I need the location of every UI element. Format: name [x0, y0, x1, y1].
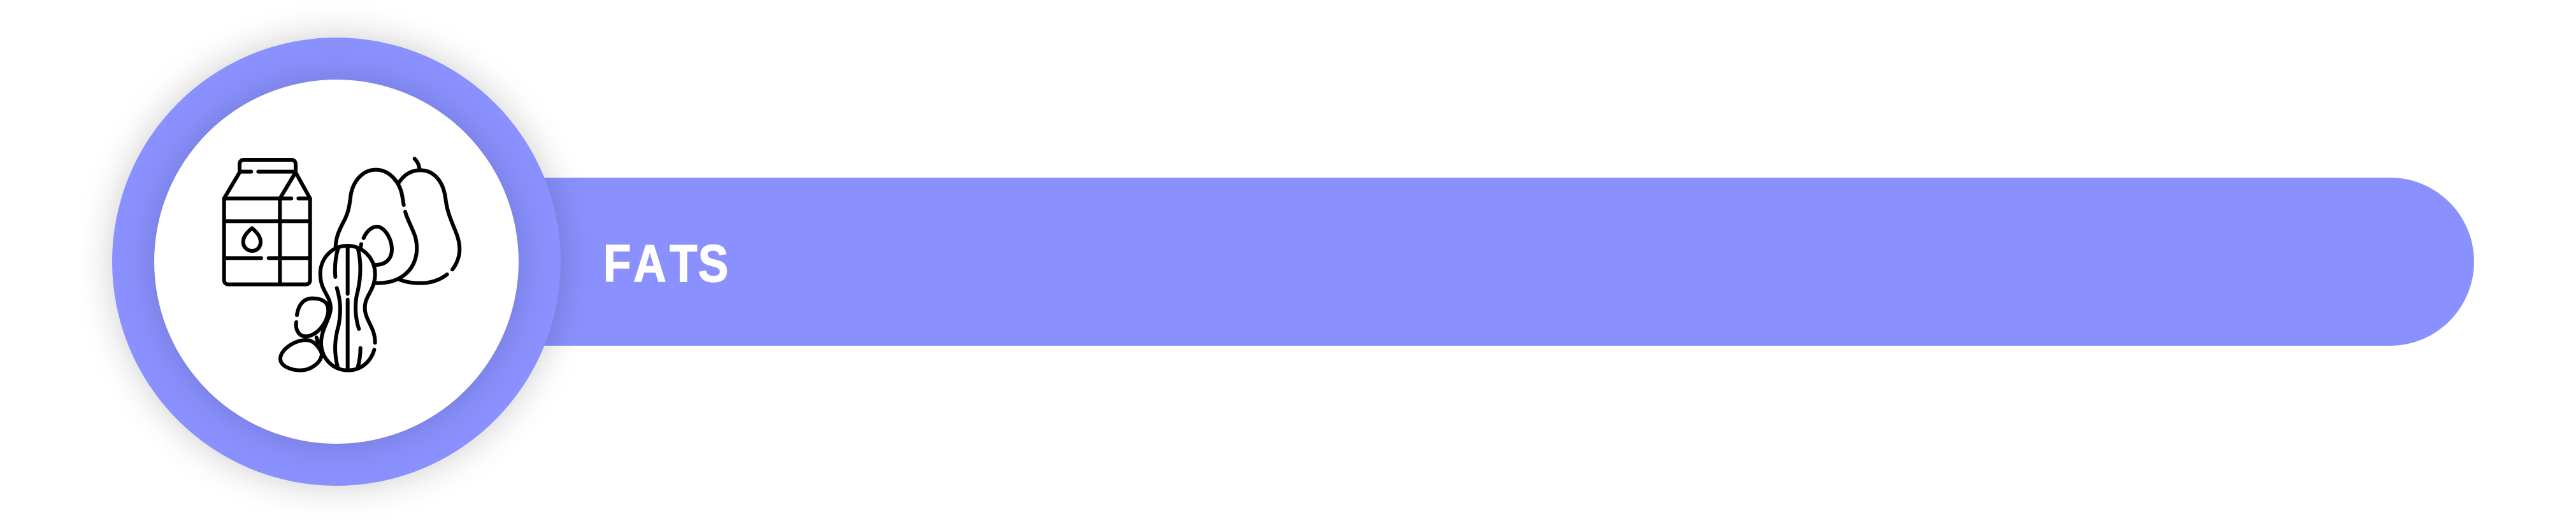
icon: avocados [336, 159, 459, 283]
icon: peanut [320, 246, 375, 371]
banner bar [446, 178, 2474, 346]
icon: milk carton, avocados and nuts [222, 157, 461, 372]
icon: almonds [280, 299, 328, 371]
icon: milk carton [224, 160, 310, 285]
icon badge: ring with white disc [112, 38, 561, 486]
